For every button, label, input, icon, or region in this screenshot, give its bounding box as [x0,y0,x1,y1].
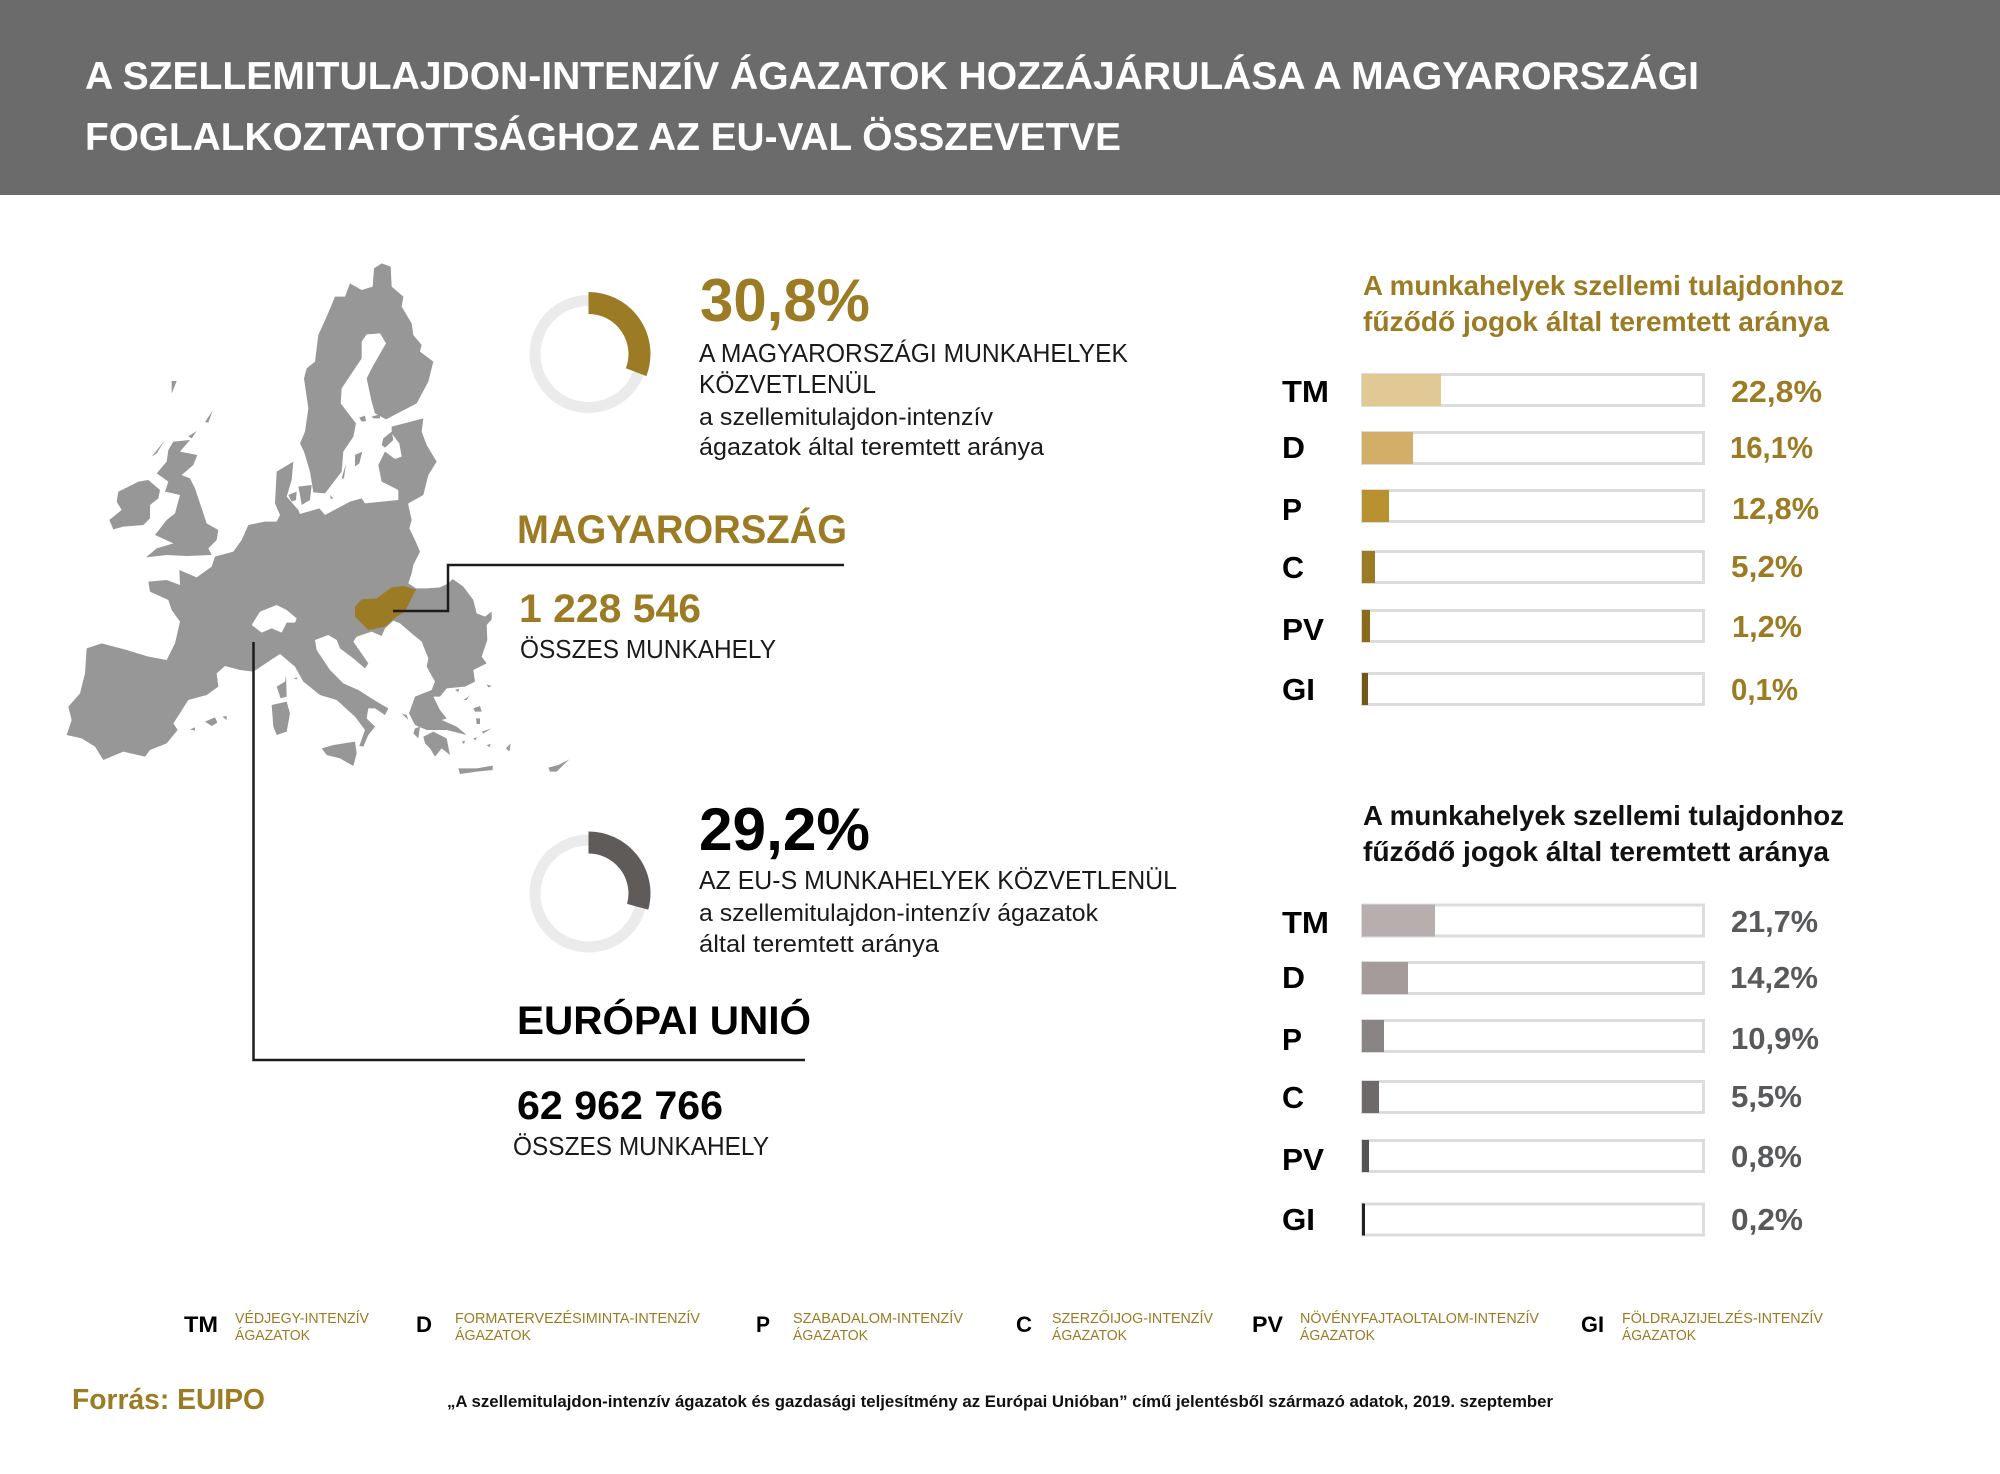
legend item: D: D [416,1312,432,1337]
legend item: GI [1581,1309,1823,1344]
donut chart: Hungary 30.8% [535,300,642,408]
bar: C EU: C [1282,1080,1304,1115]
bar: PV Hungary: PV [1282,612,1324,647]
EU total jobs caption: ÖSSZES MUNKAHELY [513,1131,769,1161]
header band with title: A SZELLEMITULAJDON-INTENZÍV ÁGAZATOK HOZZÁJÁRULÁSA A MAGYARORSZÁGI [85,54,1699,98]
legend item: C: C [1016,1312,1032,1337]
map: Switzerland gap [252,605,297,633]
legend item: PV: PV [1252,1312,1283,1337]
EU description: AZ EU-S MUNKAHELYEK KÖZVETLENÜL [699,865,1177,895]
Hungary description: ágazatok által teremtett aránya [699,434,1045,461]
bar: P EU [1282,1020,1819,1057]
legend item: GI: FÖLDRAJZIJELZÉS-INTENZÍV [1622,1309,1823,1327]
EU total jobs: 62 962 766 [517,1084,723,1128]
bar: P Hungary [1282,490,1819,527]
EU description [699,865,1177,958]
Hungary percentage: 30,8% [700,267,870,334]
legend item: TM [184,1310,369,1344]
header band with title: FOGLALKOZTATOTTSÁGHOZ AZ EU-VAL ÖSSZEVETVE [85,115,1121,159]
EU chart heading: fűződő jogok által teremtett aránya [1363,836,1829,867]
bar: PV Hungary: 1,2% [1732,609,1802,644]
Hungary description: KÖZVETLENÜL [699,369,876,399]
donut chart: EU 29.2% [535,840,642,947]
legend [184,1309,1823,1344]
bar: GI Hungary: GI [1282,672,1315,707]
bar: P Hungary: 12,8% [1732,491,1819,526]
bar: P EU: P [1282,1022,1302,1057]
panel: EU bar chart [1282,800,1844,1237]
bar: TM Hungary: TM [1282,374,1329,409]
source note: „A szellemitulajdon-intenzív ágazatok és gazdasági teljesítmény az Európai Unióban” című jelentésből származó adatok, 2019. szeptember [447,1392,1553,1411]
panel: Hungary bar chart [1282,270,1844,707]
bar: C Hungary [1282,549,1803,585]
Hungary total jobs: 1 228 546 [519,587,701,631]
bar: TM Hungary: 22,8% [1731,374,1822,409]
map: Hungary highlighted [355,586,416,630]
bar: PV EU [1282,1139,1802,1177]
bar: TM Hungary [1282,374,1822,409]
bar: GI EU: GI [1282,1202,1315,1237]
bar: C EU: 5,5% [1731,1079,1802,1114]
bar: C Hungary: C [1282,550,1304,585]
map of the European Union [67,263,569,774]
EU heading: EURÓPAI UNIÓ [517,997,811,1043]
bar: D EU: D [1282,960,1305,995]
Hungary chart heading [1363,270,1844,337]
bar: C EU [1282,1079,1802,1115]
bar: P EU: 10,9% [1731,1021,1819,1056]
header band with title [0,0,2000,195]
source label: Forrás: EUIPO [72,1384,265,1416]
legend item: TM: ÁGAZATOK [235,1327,310,1344]
bar: GI Hungary: 0,1% [1731,672,1798,707]
map: Sweden and Finland [300,263,433,493]
bar: GI EU [1282,1202,1803,1237]
panel: European Union summary [513,796,1177,1161]
legend item: P: ÁGAZATOK [793,1327,868,1344]
bar: PV EU: 0,8% [1731,1139,1802,1174]
leader line: European Union [254,642,805,1060]
map: continental Europe [67,418,492,760]
bar: TM EU: TM [1282,905,1329,940]
bar: GI EU: 0,2% [1731,1202,1803,1237]
panel: Hungary summary [517,267,1129,664]
bar: P Hungary: P [1282,492,1302,527]
map: Great Britain [146,440,218,557]
bar: D EU: 14,2% [1730,960,1818,995]
Hungary chart heading: fűződő jogok által teremtett aránya [1363,306,1829,337]
EU description: a szellemitulajdon-intenzív ágazatok [699,900,1099,927]
bar: D Hungary [1282,430,1813,465]
map: smaller islands [152,381,569,774]
legend item: GI: ÁGAZATOK [1622,1327,1696,1344]
EU chart heading: A munkahelyek szellemi tulajdonhoz [1363,800,1844,831]
legend item: TM: TM [184,1312,218,1337]
bar: D EU [1282,960,1818,995]
bar: GI Hungary [1282,672,1798,707]
legend item: GI: GI [1581,1312,1604,1337]
legend item: P [756,1310,963,1344]
Hungary heading: MAGYARORSZÁG [517,507,847,552]
Hungary description: a szellemitulajdon-intenzív [699,404,993,431]
EU chart heading [1363,800,1844,867]
bar: D Hungary: 16,1% [1730,430,1813,465]
bar: TM EU [1282,904,1818,940]
bar: C Hungary: 5,2% [1731,549,1803,584]
Hungary description: A MAGYARORSZÁGI MUNKAHELYEK [699,338,1129,368]
legend item: TM: VÉDJEGY-INTENZÍV [235,1310,369,1327]
legend item: C: ÁGAZATOK [1052,1327,1127,1344]
legend item: C [1016,1310,1213,1344]
legend item: D: FORMATERVEZÉSIMINTA-INTENZÍV [455,1310,700,1327]
legend item: PV: NÖVÉNYFAJTAOLTALOM-INTENZÍV [1300,1309,1539,1327]
bar: PV Hungary [1282,609,1802,647]
bar: D Hungary: D [1282,430,1305,465]
legend item: D [416,1310,700,1344]
legend item: P: SZABADALOM-INTENZÍV [793,1310,963,1327]
map: Ireland [109,480,160,529]
leader line: Hungary [393,565,844,611]
legend item: C: SZERZŐIJOG-INTENZÍV [1052,1310,1213,1327]
Hungary total jobs caption: ÖSSZES MUNKAHELY [520,634,776,664]
Hungary chart heading: A munkahelyek szellemi tulajdonhoz [1363,270,1844,301]
Hungary description [699,338,1129,461]
EU description: által teremtett aránya [699,931,940,958]
legend item: D: ÁGAZATOK [455,1327,531,1344]
bar: TM EU: 21,7% [1731,904,1818,939]
legend item: PV: ÁGAZATOK [1300,1327,1375,1344]
EU percentage: 29,2% [699,796,870,863]
legend item: PV [1252,1309,1539,1344]
legend item: P: P [756,1312,770,1337]
bar: PV EU: PV [1282,1142,1324,1177]
